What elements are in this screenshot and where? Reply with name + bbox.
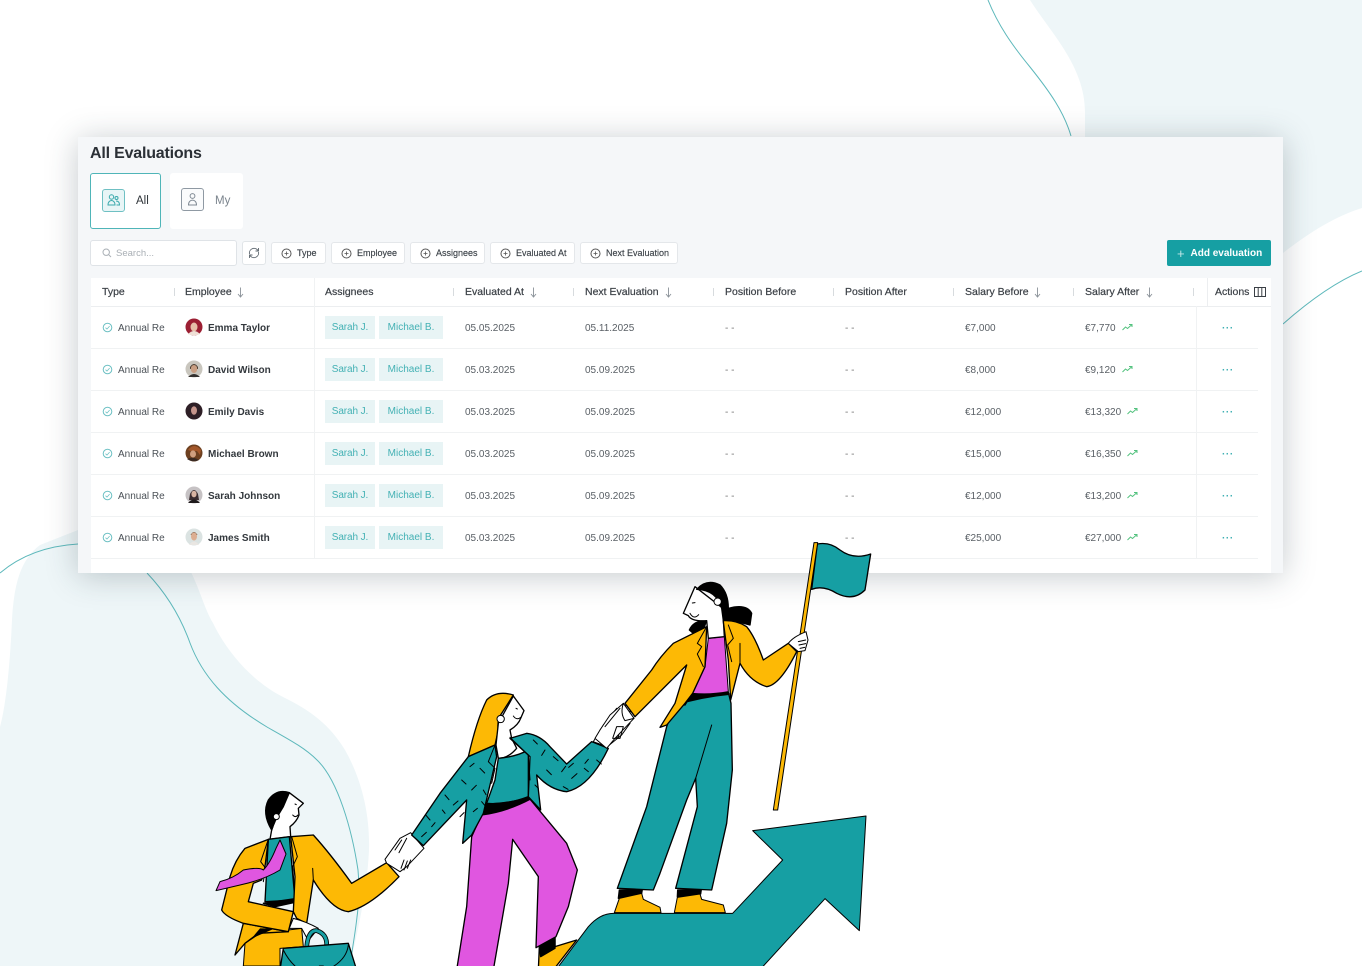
row: Emily Davis: Sarah J. <box>332 406 368 417</box>
icon: people <box>102 189 125 212</box>
row: Sarah Johnson: Annual Re <box>118 491 165 502</box>
row: Michael Brown: ··· <box>1222 449 1234 460</box>
row: Sarah Johnson: Sarah Johnson <box>208 491 280 502</box>
figure: woman in the middle <box>412 693 630 966</box>
row: Michael Brown: Sarah J. <box>332 448 368 459</box>
table header: Assignees <box>325 286 373 298</box>
row: David Wilson: 05.09.2025 <box>585 365 635 376</box>
row: James Smith <box>91 517 1258 559</box>
row: Michael Brown: Michael Brown <box>208 449 279 460</box>
search box <box>90 240 237 266</box>
row: Emma Taylor: €7,770 <box>1085 323 1116 334</box>
table header: Salary After <box>1085 286 1139 298</box>
row: Emma Taylor: 05.05.2025 <box>465 323 515 334</box>
row: David Wilson: Annual Re <box>118 365 165 376</box>
row: Emma Taylor: Michael B. <box>388 322 434 333</box>
table header: Position After <box>845 286 907 298</box>
arrow: growth <box>553 816 866 966</box>
table column rule <box>314 278 315 558</box>
row: David Wilson: - - <box>845 365 854 376</box>
row: Emma Taylor: - - <box>725 323 734 334</box>
row: Emily Davis: Emily Davis <box>208 407 264 418</box>
tab label: All <box>136 195 149 207</box>
title: All Evaluations <box>90 145 202 162</box>
row: Emma Taylor: Sarah J. <box>332 322 368 333</box>
row: Michael Brown: 05.03.2025 <box>465 449 515 460</box>
row: Emma Taylor: Annual Re <box>118 323 165 334</box>
tab label: My <box>215 195 230 207</box>
row: Sarah Johnson: - - <box>845 491 854 502</box>
row: David Wilson: €9,120 <box>1085 365 1116 376</box>
row: Michael Brown: Annual Re <box>118 449 165 460</box>
filter: Evaluated At: Evaluated At <box>516 248 567 258</box>
row: Emily Davis: €12,000 <box>965 407 1001 418</box>
row: David Wilson: 05.03.2025 <box>465 365 515 376</box>
row: Emily Davis: ··· <box>1222 407 1234 418</box>
row: James Smith: ··· <box>1222 533 1234 544</box>
icon: person <box>181 188 204 211</box>
filter: Assignees <box>410 242 485 264</box>
figure: man with briefcase <box>216 791 424 966</box>
row: Sarah Johnson: €13,200 <box>1085 491 1121 502</box>
flag <box>812 543 871 597</box>
row: Emily Davis: - - <box>845 407 854 418</box>
row: James Smith: €25,000 <box>965 533 1001 544</box>
table header: Actions <box>1215 286 1249 298</box>
row: David Wilson: €8,000 <box>965 365 996 376</box>
refresh button <box>242 241 266 265</box>
row: James Smith: - - <box>845 533 854 544</box>
row: David Wilson: ··· <box>1222 365 1234 376</box>
row: Emma Taylor: ··· <box>1222 323 1234 334</box>
table header: Salary Before <box>965 286 1029 298</box>
row: Sarah Johnson: Michael B. <box>388 490 434 501</box>
row: Michael Brown: - - <box>845 449 854 460</box>
row: David Wilson <box>91 349 1258 391</box>
row: Sarah Johnson <box>91 475 1258 517</box>
search box: Search... <box>116 248 154 259</box>
row: James Smith: 05.03.2025 <box>465 533 515 544</box>
row: David Wilson: David Wilson <box>208 365 271 376</box>
table header <box>91 278 1271 307</box>
row: Emma Taylor: 05.11.2025 <box>585 323 634 334</box>
row: Michael Brown: €15,000 <box>965 449 1001 460</box>
wave line: right <box>1283 271 1362 324</box>
filter: Type: Type <box>297 248 317 258</box>
panel: table background <box>91 278 1271 573</box>
row: David Wilson: Sarah J. <box>332 364 368 375</box>
add evaluation button: + <box>1177 246 1185 261</box>
row: Emily Davis: - - <box>725 407 734 418</box>
filter: Employee: Employee <box>357 248 397 258</box>
tab: All <box>90 173 161 229</box>
table header: Type <box>102 286 125 298</box>
table header: Evaluated At <box>465 286 524 298</box>
row: Emily Davis: Annual Re <box>118 407 165 418</box>
tab: My <box>170 173 243 229</box>
row: Emily Davis: €13,320 <box>1085 407 1121 418</box>
table header: Next Evaluation <box>585 286 659 298</box>
row: Michael Brown: - - <box>725 449 734 460</box>
filter: Evaluated At <box>490 242 575 264</box>
row: James Smith: - - <box>725 533 734 544</box>
row: James Smith: Annual Re <box>118 533 165 544</box>
row: Emily Davis: Michael B. <box>388 406 434 417</box>
row: Sarah Johnson: - - <box>725 491 734 502</box>
add evaluation button: Add evaluation <box>1190 248 1262 259</box>
blob: bottom left <box>0 530 369 966</box>
table header: Employee <box>185 286 232 298</box>
row: David Wilson: Michael B. <box>388 364 434 375</box>
filter: Assignees: Assignees <box>436 248 478 258</box>
row: Michael Brown: 05.09.2025 <box>585 449 635 460</box>
row: Sarah Johnson: €12,000 <box>965 491 1001 502</box>
row: Sarah Johnson: Sarah J. <box>332 490 368 501</box>
row: Emily Davis: 05.03.2025 <box>465 407 515 418</box>
wave line: left <box>0 544 78 573</box>
row: Michael Brown: Michael B. <box>388 448 434 459</box>
row: Michael Brown: €16,350 <box>1085 449 1121 460</box>
wave line: top <box>988 0 1071 136</box>
row: David Wilson: - - <box>725 365 734 376</box>
filter: Next Evaluation: Next Evaluation <box>606 248 669 258</box>
filter: Employee <box>331 242 405 264</box>
figure: woman holding the flag <box>595 543 871 913</box>
panel: evaluations card <box>78 137 1283 573</box>
row: James Smith: Michael B. <box>388 532 434 543</box>
row: Michael Brown <box>91 433 1258 475</box>
row: James Smith: 05.09.2025 <box>585 533 635 544</box>
filter: Next Evaluation <box>580 242 678 264</box>
blob: top right <box>1030 0 1362 253</box>
row: Sarah Johnson: 05.03.2025 <box>465 491 515 502</box>
table header: Position Before <box>725 286 796 298</box>
row: James Smith: €27,000 <box>1085 533 1121 544</box>
actions column rule <box>1196 306 1197 558</box>
row: Emma Taylor: €7,000 <box>965 323 996 334</box>
row: Emma Taylor: - - <box>845 323 854 334</box>
row: Emma Taylor: Emma Taylor <box>208 323 270 334</box>
filter: Type <box>271 242 326 264</box>
add evaluation button <box>1167 240 1271 266</box>
wave line: bottom <box>147 573 359 966</box>
row: James Smith: James Smith <box>208 533 270 544</box>
row: Sarah Johnson: ··· <box>1222 491 1234 502</box>
row: Sarah Johnson: 05.09.2025 <box>585 491 635 502</box>
row: Emma Taylor <box>91 307 1258 349</box>
row: James Smith: Sarah J. <box>332 532 368 543</box>
row: Emily Davis <box>91 391 1258 433</box>
row: Emily Davis: 05.09.2025 <box>585 407 635 418</box>
